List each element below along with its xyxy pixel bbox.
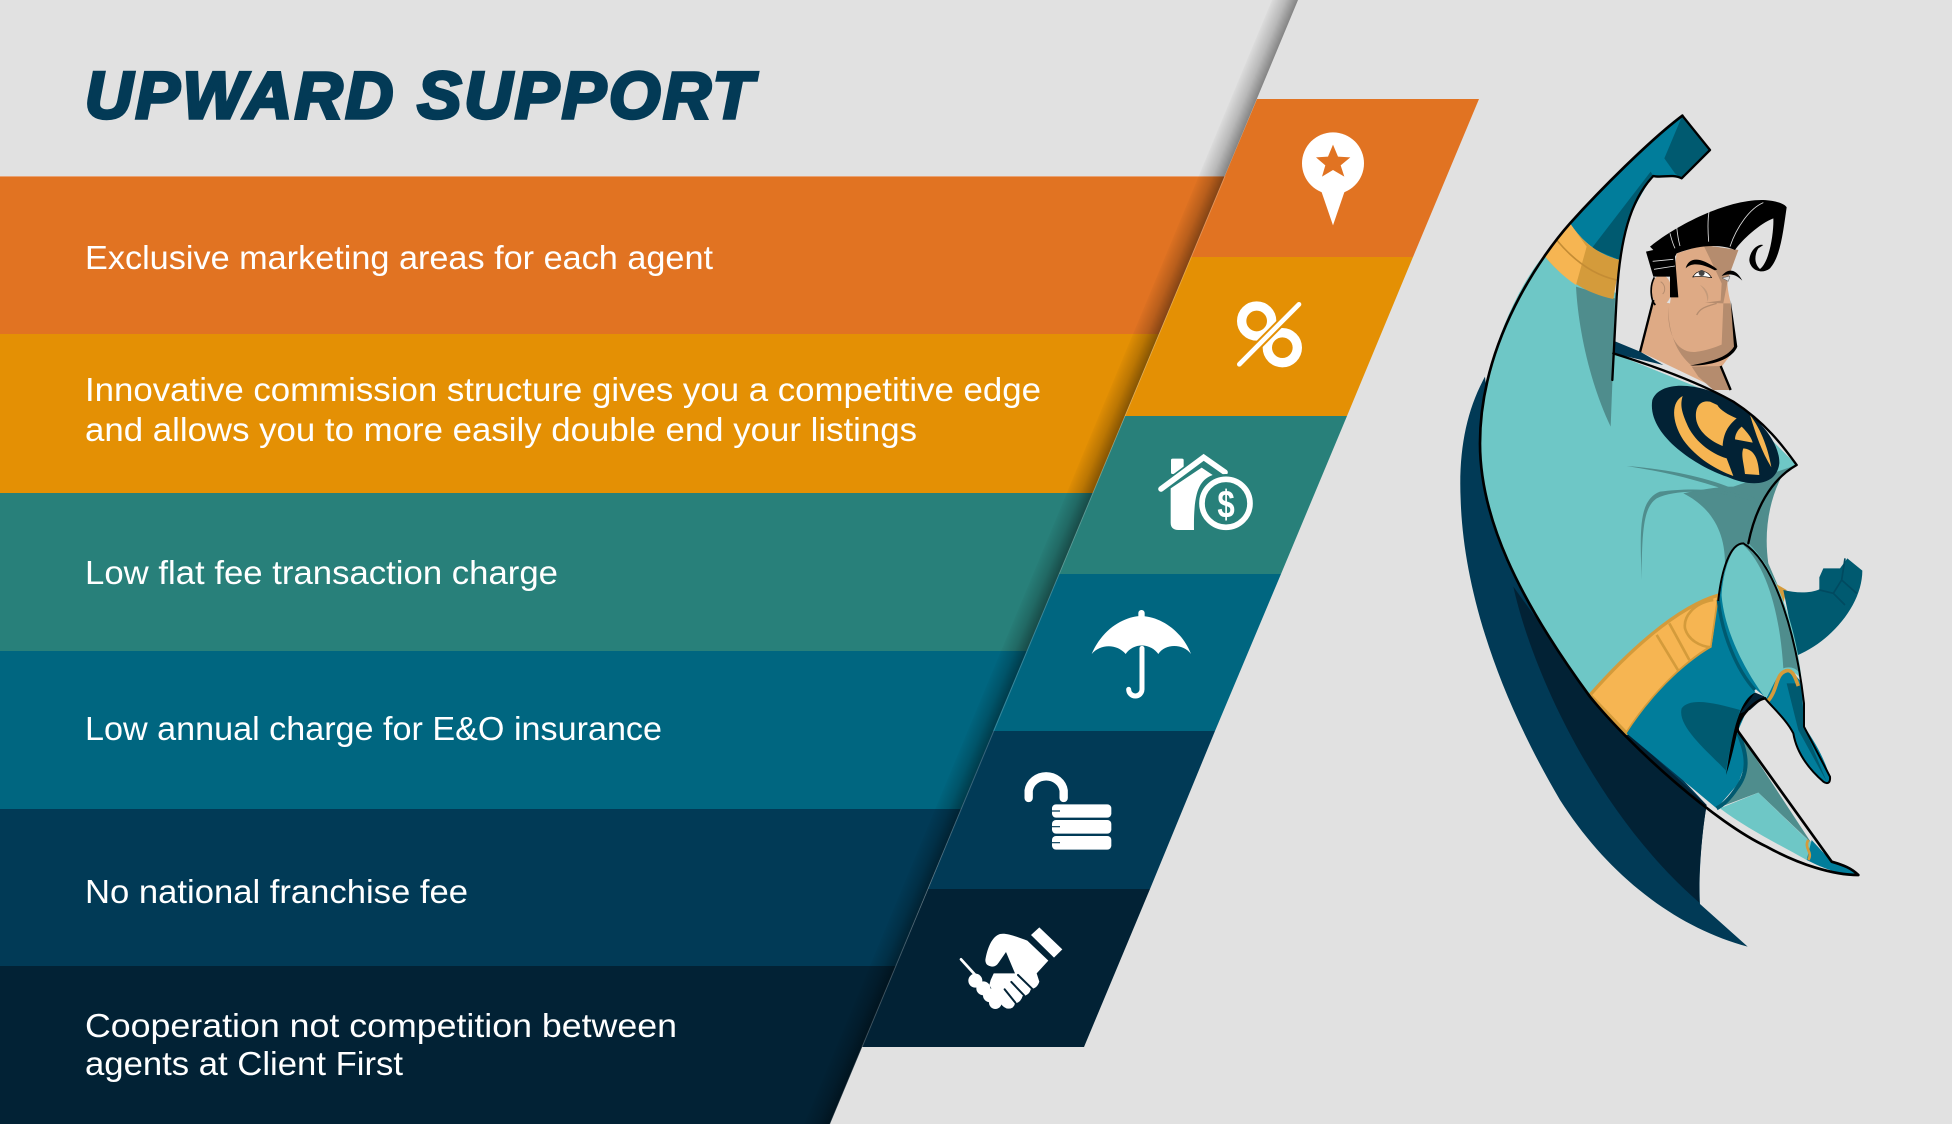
icon: map pin with star [1302,132,1364,225]
row: cooperation: Cooperation not competition between [85,1007,677,1044]
panel: icon column [830,99,1479,1124]
icon: house with dollar coin: $ [1217,482,1235,526]
superhero character [1460,116,1862,947]
row: E&O insurance: Low annual charge for E&O insurance [85,710,662,747]
row: exclusive marketing areas [0,176,1225,334]
emblem [1652,386,1779,483]
row: commission structure: and allows you to more easily double end your listings [85,411,917,448]
row: E&O insurance [0,651,1027,809]
row: commission structure: Innovative commission structure gives you a competitive edge [85,371,1041,408]
collar shoulder [1613,341,1663,365]
suit torso and arm [1480,255,1797,733]
row: cooperation [0,966,896,1124]
belt [1590,595,1719,733]
row: no franchise fee [0,809,961,966]
title: UPWARD SUPPORT [85,58,758,132]
trunks and far leg [1627,600,1858,875]
panel: benefit rows [0,176,1225,1124]
arm cuff [1544,223,1620,299]
icon: open lock [1029,776,1111,850]
row: flat fee: Low flat fee transaction charge [85,554,558,591]
row: cooperation: agents at Client First [85,1045,403,1082]
row: no franchise fee: No national franchise fee [85,873,468,910]
row: exclusive marketing areas: Exclusive marketing areas for each agent [85,239,713,276]
far arm and fist [1775,558,1862,656]
row: flat fee [0,493,1093,651]
icon: handshake [961,927,1062,1009]
icon: umbrella [1092,610,1191,696]
raised thigh and boot [1712,543,1830,783]
icon: house with dollar coin [1161,457,1255,533]
cape [1460,377,1748,947]
icon: percent sign [1239,304,1299,364]
row: commission structure [0,334,1159,493]
ink outlines [1480,116,1858,875]
raised arm glove [1570,116,1710,260]
head [1640,200,1787,390]
